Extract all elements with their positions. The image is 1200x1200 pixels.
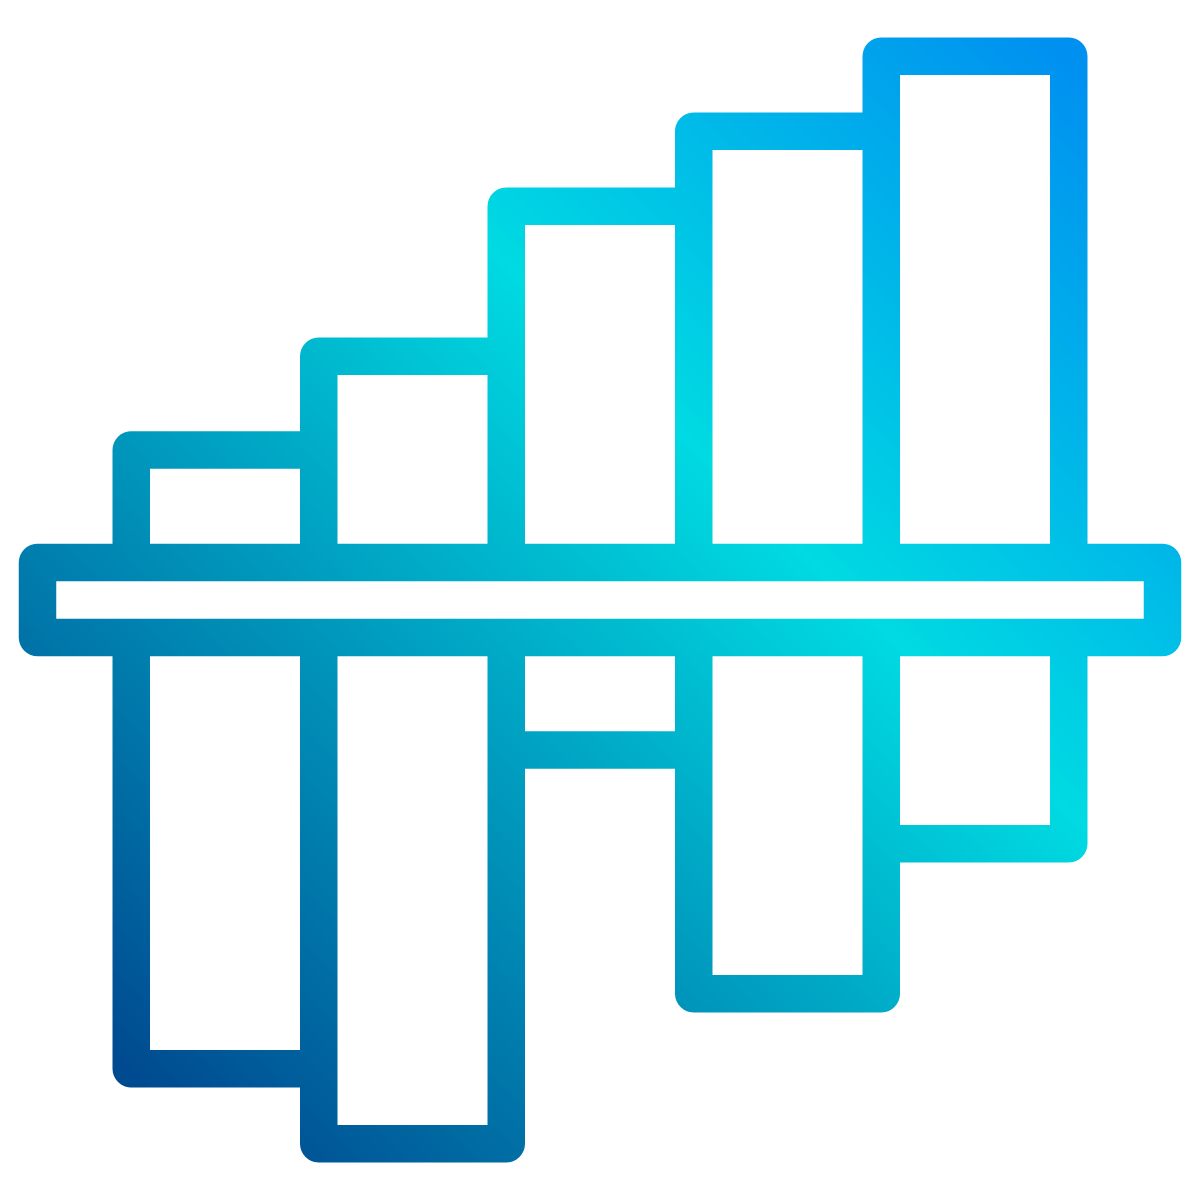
lower bar 1 [131,638,319,1069]
lower bar 2 [319,638,506,1144]
upper bar 5 [881,56,1069,562]
upper bar 4 [694,131,881,562]
upper bar 2 [319,356,506,562]
lower bar 4 [694,638,881,994]
lower bar 5 [881,638,1069,844]
lower bar 3 [506,638,694,750]
central horizontal axis bar [38,562,1162,638]
upper bar 3 [506,206,694,562]
upper bar 1 [131,450,319,562]
